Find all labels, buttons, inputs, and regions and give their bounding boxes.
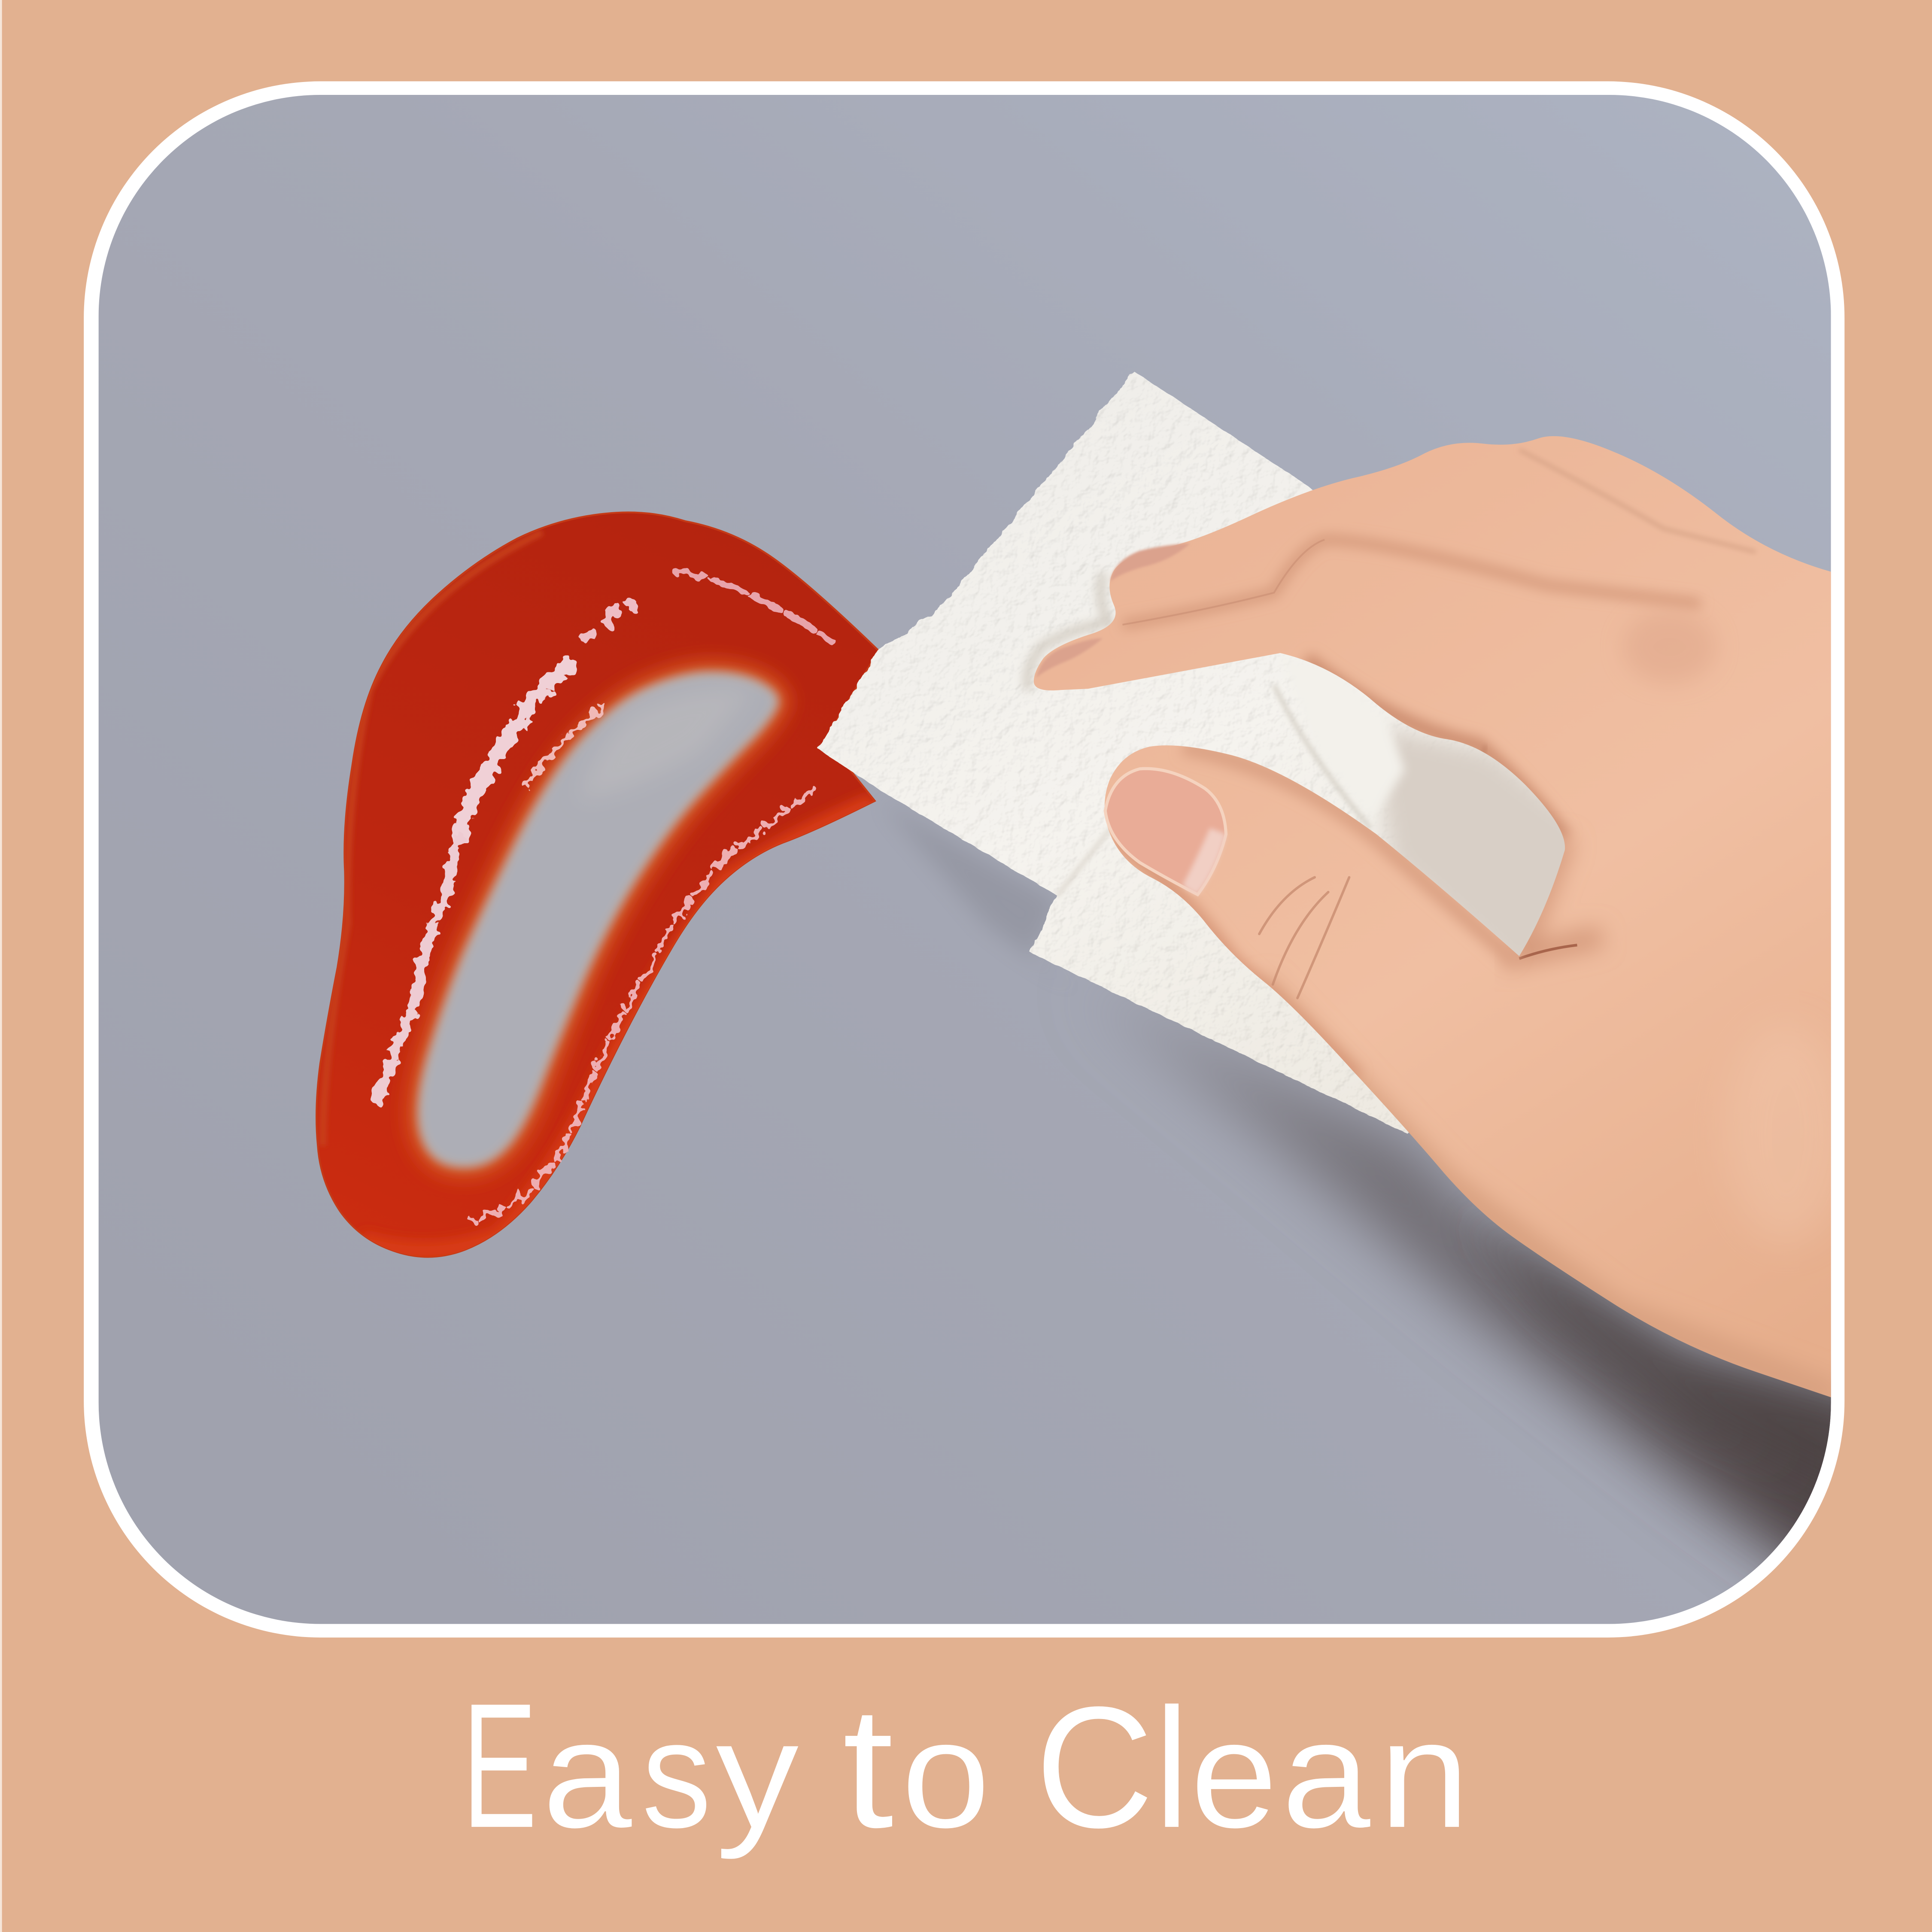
back of hand light patch bbox=[1725, 1023, 1848, 1245]
panel: product photo scene bbox=[99, 95, 1873, 1626]
title: a bbox=[542, 1688, 633, 1860]
title: s bbox=[641, 1688, 712, 1860]
title: E bbox=[462, 1666, 537, 1865]
towel sheet bbox=[818, 371, 1614, 1133]
knuckle shadow bbox=[1623, 610, 1716, 684]
wrinkle 2 bbox=[1273, 892, 1328, 984]
highlight: left streak upper bbox=[459, 665, 569, 838]
flap edge shadow bbox=[1057, 823, 1115, 896]
title: y bbox=[715, 1688, 799, 1861]
panel: white rounded frame bbox=[84, 81, 1844, 1637]
title: o bbox=[901, 1688, 990, 1860]
highlight: top streak bbox=[675, 572, 833, 642]
nail plate bbox=[1105, 769, 1226, 895]
towel folds and shading bbox=[1027, 573, 1602, 986]
pale top of wiped area bbox=[579, 688, 754, 801]
thumb base crease bbox=[1519, 945, 1577, 959]
thumb knuckle wrinkles bbox=[1259, 877, 1349, 998]
crease between index and middle finger bbox=[1122, 540, 1324, 625]
hand silhouette bbox=[1034, 436, 1848, 1405]
left edge sliver bbox=[0, 0, 2, 1932]
title: e bbox=[1190, 1688, 1278, 1860]
wiped clean area bbox=[419, 674, 777, 1166]
title: a bbox=[1282, 1688, 1372, 1860]
fingernail: upper finger bbox=[1110, 544, 1190, 582]
glossy highlights bbox=[377, 572, 833, 1220]
ketchup smear bbox=[316, 512, 878, 1257]
title: l bbox=[1154, 1672, 1190, 1864]
ketchup shading bbox=[323, 532, 875, 1251]
thumb underside shade bbox=[1115, 838, 1355, 1078]
shade between fingers bbox=[1122, 540, 1700, 625]
highlight: left streak lower bbox=[377, 838, 459, 1099]
highlight: bottom streak bbox=[472, 789, 813, 1220]
highlight: dots bbox=[585, 604, 633, 637]
lower finger shade bbox=[1306, 659, 1565, 838]
palm gap shadow bbox=[1519, 838, 1602, 956]
bright rim lower right bbox=[361, 801, 875, 1251]
wrinkle 1 bbox=[1259, 877, 1315, 934]
finger contact shadow bbox=[1027, 573, 1109, 690]
orange halo around wiped area bbox=[419, 674, 777, 1166]
title: C bbox=[1035, 1670, 1154, 1864]
raised fold bbox=[1280, 656, 1405, 823]
orange rim left bbox=[323, 532, 542, 1146]
title: n bbox=[1379, 1688, 1470, 1860]
lower edge shade bbox=[1257, 986, 1836, 1397]
wrinkle 3 bbox=[1297, 877, 1349, 998]
hand shading bbox=[1115, 450, 1848, 1397]
cast shadow of hand bbox=[1139, 1014, 1831, 1579]
hand bbox=[1034, 436, 1848, 1405]
back finger line bbox=[1519, 450, 1756, 552]
fingernail: middle finger bbox=[1036, 638, 1103, 677]
fold crease bbox=[1274, 685, 1370, 828]
title: t bbox=[842, 1670, 895, 1864]
finger crease at palm bbox=[1478, 745, 1486, 789]
thumb top shade bbox=[1183, 747, 1516, 961]
soft shadow under paper bbox=[881, 801, 1084, 998]
deep shadow near hand bbox=[1466, 1214, 1873, 1510]
grey surface bbox=[99, 95, 1831, 1624]
nail moon bbox=[1183, 828, 1226, 895]
thumbnail bbox=[1105, 769, 1226, 895]
highlight: inner line bbox=[526, 706, 604, 786]
paper towel bbox=[818, 371, 1614, 1133]
ketchup body bbox=[316, 512, 878, 1257]
shaded inner region between fingers and thumb bbox=[1380, 727, 1602, 986]
